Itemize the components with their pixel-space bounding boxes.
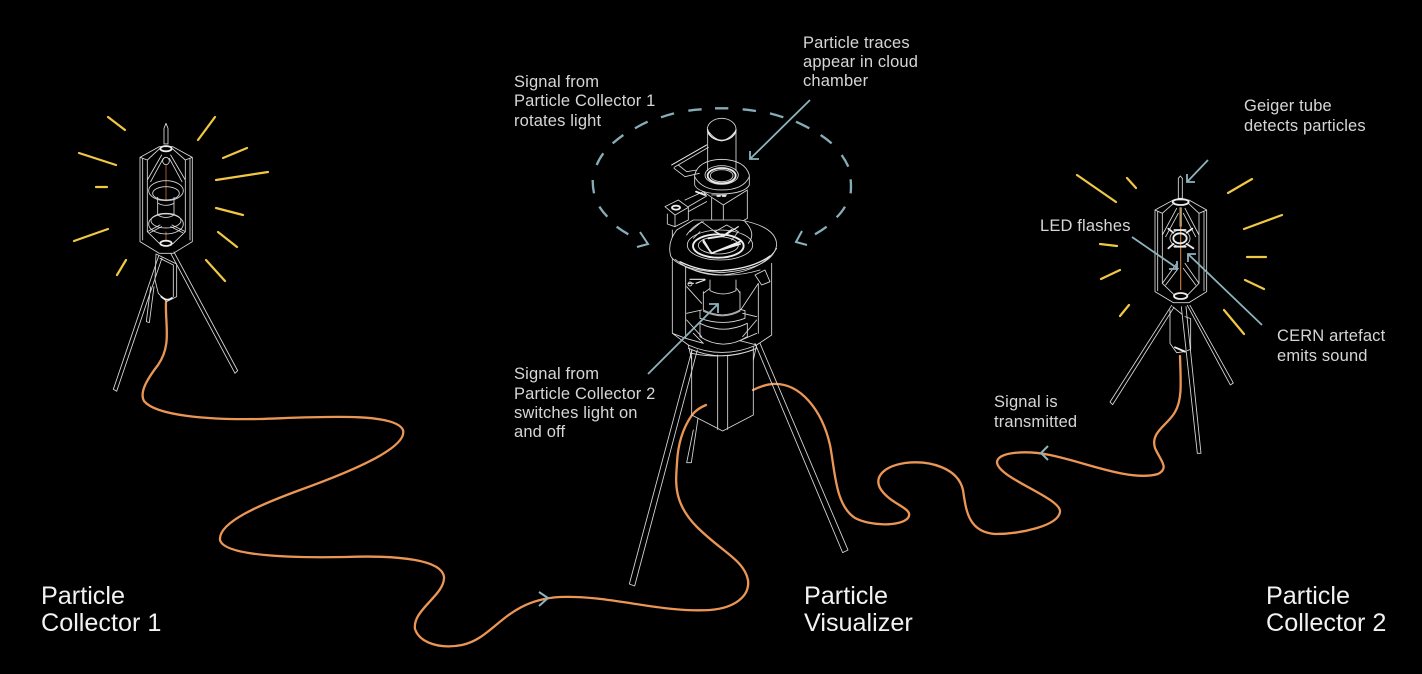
cloud chamber cylinder [707, 118, 736, 171]
arrow: CERN artefact [1188, 254, 1262, 325]
text: signal from collector 2: and off [514, 423, 565, 441]
text: signal from collector 2: switches light on [514, 404, 638, 422]
cable: Particle Collector 2 to Visualizer [753, 356, 1181, 534]
text: CERN: CERN artefact [1277, 327, 1386, 345]
body frame [672, 227, 772, 360]
legs [1110, 305, 1233, 453]
heading: Particle Visualizer: Particle [804, 582, 888, 610]
arrow: Geiger tube [1187, 160, 1208, 182]
panel: Particle Visualizer device [593, 108, 851, 586]
tripod legs and lower column [629, 343, 848, 586]
upper machine [665, 118, 749, 232]
text: transmitted: Signal is [994, 393, 1058, 411]
drum [688, 279, 747, 344]
text: traces: appear in cloud [803, 53, 918, 71]
CERN artefact [1168, 229, 1193, 248]
arrow: particle traces [750, 100, 810, 159]
electronics box [155, 254, 177, 302]
text: traces: Particle traces [803, 34, 910, 52]
frame [1155, 176, 1207, 303]
text: transmitted: transmitted [994, 413, 1077, 431]
arrow: cable signal to Visualizer [539, 592, 548, 606]
text: signal from collector 1: Signal from [514, 73, 599, 91]
text: signal from collector 1: Particle Collector 1 [514, 92, 655, 110]
panel: Particle Collector 2 device [1110, 176, 1233, 453]
panel: Particle Collector 1 device [113, 123, 238, 391]
arrow: rotation right head [796, 231, 807, 245]
icon: yellow flash rays, Collector 1 [74, 117, 268, 281]
heading: Particle Collector 2: Collector 2 [1266, 609, 1386, 637]
legs [113, 252, 238, 391]
text: traces: chamber [803, 72, 869, 90]
rotation dashes [593, 108, 851, 234]
heading: Particle Collector 2: Particle [1266, 582, 1350, 610]
frame [140, 123, 192, 253]
flange [695, 159, 749, 194]
arm [672, 145, 708, 177]
arrow: rotation left head [637, 232, 648, 247]
heading: Particle Collector 1: Collector 1 [41, 609, 161, 637]
text: LED: LED flashes [1040, 217, 1131, 235]
square housing [703, 190, 747, 232]
text: signal from collector 2: Particle Collector 2 [514, 385, 655, 403]
rotating disk and body [670, 220, 777, 360]
heading: Particle Collector 1: Particle [41, 582, 125, 610]
text: signal from collector 2: Signal from [514, 365, 599, 383]
text: signal from collector 1: rotates light [514, 112, 602, 130]
text: CERN: emits sound [1277, 347, 1368, 365]
arrow: signal transmitted [1041, 446, 1048, 460]
cable: Particle Collector 1 to Visualizer [143, 302, 748, 646]
arrow: LED flashes [1132, 237, 1177, 269]
rotating disk [670, 220, 777, 275]
icon: yellow flash rays, Collector 2 [1077, 175, 1282, 334]
electronics box [1170, 307, 1191, 353]
heading: Particle Visualizer: Visualizer [804, 609, 913, 637]
motor [665, 192, 707, 227]
text: Geiger: Geiger tube [1244, 97, 1332, 115]
text: Geiger: detects particles [1244, 117, 1366, 135]
spool [149, 181, 183, 234]
arrow: signal from Collector 2 [648, 304, 718, 374]
